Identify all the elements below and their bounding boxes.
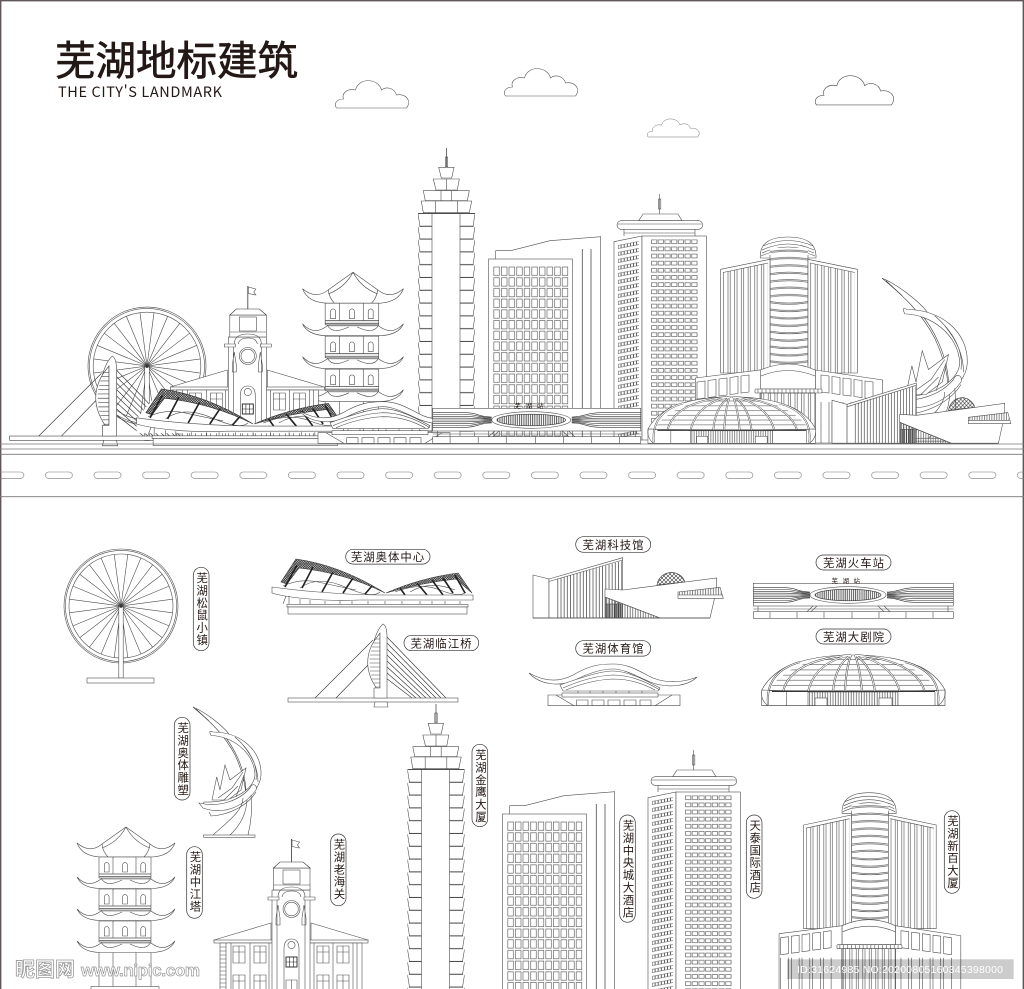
landmark: gymnasium	[529, 664, 697, 706]
label: Olympic centre: 芜湖奥体中心	[351, 550, 425, 564]
skyline: science museum	[832, 383, 1011, 443]
skyline: Zhongjiang pagoda	[303, 272, 403, 440]
label: grand theatre: 芜湖大剧院	[823, 630, 885, 644]
skyline: railway station	[433, 401, 641, 443]
label: railway station: 芜湖火车站	[823, 556, 885, 570]
landmark: Jinying tower	[408, 704, 464, 989]
label: squirrel town: 芜湖松鼠小镇	[195, 571, 208, 646]
cloud 1	[335, 81, 409, 108]
landmark: squirrel town wheel	[64, 549, 178, 683]
label: Tiantai hotel: 天泰国际酒店	[748, 820, 761, 894]
skyline: grand theatre	[648, 397, 816, 443]
landmark: Zhongjiang pagoda	[77, 827, 175, 989]
landmark: Central City hotel	[502, 792, 615, 989]
skyline: ferris wheel	[88, 307, 206, 441]
landmark: grand theatre	[762, 655, 945, 706]
label: squirrel town	[193, 567, 209, 651]
label: customs house: 芜湖老海关	[332, 838, 345, 900]
skyline: Central City hotel	[488, 237, 601, 440]
label: Jinying tower: 芜湖金鹰大厦	[474, 748, 487, 823]
road dashes	[0, 471, 1024, 480]
skyline: Tiantai hotel	[614, 194, 706, 440]
label: science museum: 芜湖科技馆	[583, 538, 644, 552]
label: bridge: 芜湖临江桥	[411, 636, 472, 650]
label: gymnasium: 芜湖体育馆	[583, 642, 644, 656]
label: Jinying tower	[472, 744, 488, 827]
watermark: image id strip	[787, 959, 1014, 979]
skyline: Xinbai building	[695, 237, 883, 443]
watermark: site name	[15, 959, 200, 981]
skyline panel	[10, 148, 1011, 446]
label: Central City hotel: 芜湖中央城大酒店	[622, 819, 634, 919]
label: Tiantai hotel	[746, 815, 762, 898]
label: pagoda	[187, 847, 202, 918]
landmark: old customs house	[214, 839, 368, 989]
label: gymnasium	[576, 641, 651, 656]
cloud 4	[815, 76, 894, 105]
cloud 3	[647, 119, 699, 137]
skyline: old customs house	[170, 286, 324, 445]
label: customs house	[331, 834, 346, 906]
subtitle: THE CITY'S LANDMARK	[58, 81, 223, 102]
road	[0, 444, 1024, 497]
label: pagoda: 芜湖中江塔	[188, 850, 201, 913]
label: sculpture	[174, 717, 190, 800]
cloud 2	[504, 69, 578, 96]
label: science museum	[576, 537, 651, 552]
watermark: site name: 昵图网	[15, 959, 75, 981]
landmark: science museum	[533, 558, 723, 618]
skyline: sculpture	[882, 278, 967, 441]
label: railway station	[816, 555, 891, 570]
landmark: sculpture	[193, 707, 261, 837]
skyline: gymnasium	[299, 402, 467, 443]
landmark: bridge	[288, 624, 458, 707]
watermark: site name: www.nipic.com	[80, 961, 200, 980]
title: 芜湖地标建筑	[55, 38, 298, 84]
label: bridge	[404, 635, 479, 651]
landmark: Tiantai hotel	[648, 750, 740, 989]
label: sculpture: 芜湖奥体雕塑	[176, 721, 189, 796]
landmark: Xinbai building	[779, 793, 961, 989]
label: grand theatre	[816, 629, 891, 644]
skyline: Jinying tower	[418, 148, 475, 436]
skyline: bridge	[10, 356, 193, 446]
watermark: image id strip: ID:31624985 NO:20200805160345398000	[797, 964, 1003, 976]
skyline: Olympic centre	[137, 389, 345, 446]
clouds	[335, 69, 894, 137]
label: Xinbai building: 芜湖新百大厦	[946, 814, 959, 889]
landmark: Olympic centre	[272, 559, 474, 614]
landmark: railway station	[753, 576, 953, 618]
